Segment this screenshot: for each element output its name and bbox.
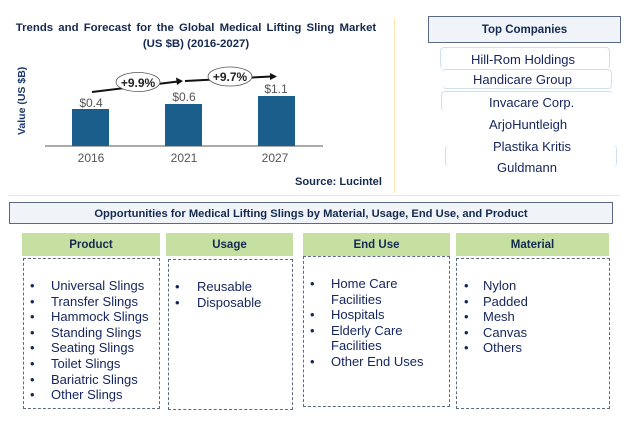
usage items: Reusable (197, 279, 252, 294)
product bullets: • (30, 387, 35, 402)
chart title: (US $B) (2016-2027) (143, 38, 249, 50)
usage bullets (175, 279, 180, 310)
product items: Universal Slings (51, 278, 144, 293)
end use items: Facilities (331, 338, 382, 353)
material items: Mesh (483, 309, 515, 324)
usage items: Disposable (197, 295, 261, 310)
end use items: Elderly Care (331, 323, 403, 338)
end use bullets: • (310, 307, 315, 322)
product items: Bariatric Slings (51, 372, 138, 387)
product header (22, 233, 160, 256)
product bullets: • (30, 340, 35, 355)
end use items: Other End Uses (331, 354, 424, 369)
end use bullets (310, 276, 315, 369)
product bullets (30, 278, 35, 402)
product items: Toilet Slings (51, 356, 120, 371)
callout: +9.9% (116, 72, 160, 92)
arrow: second growth (185, 73, 277, 81)
product bullets: • (30, 372, 35, 387)
bar 2021: 2021 (171, 151, 198, 165)
callout: +9.7%: +9.7% (213, 70, 248, 84)
material bullets: • (464, 278, 469, 293)
chart title (16, 22, 376, 50)
product bullets: • (30, 294, 35, 309)
product items: Seating Slings (51, 340, 134, 355)
panel: usage (166, 233, 293, 410)
horizontal yellow line (8, 195, 620, 196)
end use bullets: • (310, 323, 315, 338)
top companies heading: Top Companies (482, 24, 567, 36)
company outline: Invacare (441, 91, 613, 111)
usage items (197, 279, 261, 310)
company: Plastika Kritis: Plastika Kritis (493, 139, 571, 154)
panel: end use (303, 233, 450, 407)
material header: Material (511, 239, 554, 251)
company outline: Handicare (442, 69, 612, 89)
material bullets: • (464, 309, 469, 324)
usage header: Usage (212, 239, 247, 251)
company: Guldmann: Guldmann (497, 160, 557, 175)
end use list box (303, 256, 450, 407)
end use items: Home Care (331, 276, 397, 291)
product header: Product (69, 239, 113, 251)
material items: Others (483, 340, 522, 355)
usage bullets: • (175, 279, 180, 294)
arrow: first growth (92, 78, 183, 92)
vertical yellow line (394, 18, 395, 193)
opportunities heading: Opportunities for Medical Lifting Slings by Material, Usage, End Use, and Product (94, 208, 528, 220)
end use items: Hospitals (331, 307, 384, 322)
usage header (166, 233, 293, 256)
top companies heading (428, 16, 621, 43)
end use items: Facilities (331, 292, 382, 307)
end use bullets: • (310, 354, 315, 369)
company: ArjoHuntleigh: ArjoHuntleigh (489, 117, 567, 132)
material items: Padded (483, 294, 528, 309)
panel: material (456, 233, 610, 409)
material items: Canvas (483, 325, 527, 340)
material bullets (464, 278, 469, 355)
usage bullets: • (175, 295, 180, 310)
bar 2027: 2027 (262, 151, 289, 165)
material list box (456, 258, 610, 409)
company: Handicare Group: Handicare Group (473, 72, 572, 87)
product list box (23, 258, 160, 409)
callout: +9.7% (208, 67, 252, 86)
product bullets: • (30, 278, 35, 293)
product items: Hammock Slings (51, 309, 149, 324)
material items (483, 278, 528, 355)
callout: +9.9%: +9.9% (121, 76, 156, 90)
company: Invacare Corp.: Invacare Corp. (489, 95, 574, 110)
bar 2027: $1.1 (264, 82, 288, 96)
product bullets: • (30, 356, 35, 371)
bar 2021 (165, 90, 202, 165)
source note: Source: Lucintel (295, 176, 382, 188)
company outline: Plastika (445, 145, 617, 167)
bar 2021: $0.6 (172, 90, 196, 104)
company: Hill-Rom Holdings: Hill-Rom Holdings (471, 52, 575, 67)
product items: Standing Slings (51, 325, 141, 340)
end use header: End Use (353, 239, 400, 251)
material bullets: • (464, 294, 469, 309)
chart title: Trends and Forecast for the Global Medical Lifting Sling Market (16, 22, 376, 34)
material bullets: • (464, 340, 469, 355)
material items: Nylon (483, 278, 516, 293)
material header (456, 233, 609, 256)
panel: product (22, 233, 160, 409)
opportunities heading (9, 202, 613, 224)
bar 2016: $0.4 (79, 96, 103, 110)
bar 2016 (72, 96, 109, 165)
product items: Transfer Slings (51, 294, 138, 309)
company outline: Hill-Rom (440, 47, 610, 69)
product bullets: • (30, 325, 35, 340)
end use bullets: • (310, 276, 315, 291)
bar chart (16, 66, 323, 165)
bar 2016: 2016 (78, 151, 105, 165)
end use items (331, 276, 424, 369)
usage list box (168, 259, 293, 410)
y axis label: Value (US $B) (16, 67, 28, 135)
material bullets: • (464, 325, 469, 340)
bar 2027 (258, 82, 295, 165)
product bullets: • (30, 309, 35, 324)
end use header (303, 233, 450, 256)
product items: Other Slings (51, 387, 123, 402)
product items (51, 278, 149, 402)
